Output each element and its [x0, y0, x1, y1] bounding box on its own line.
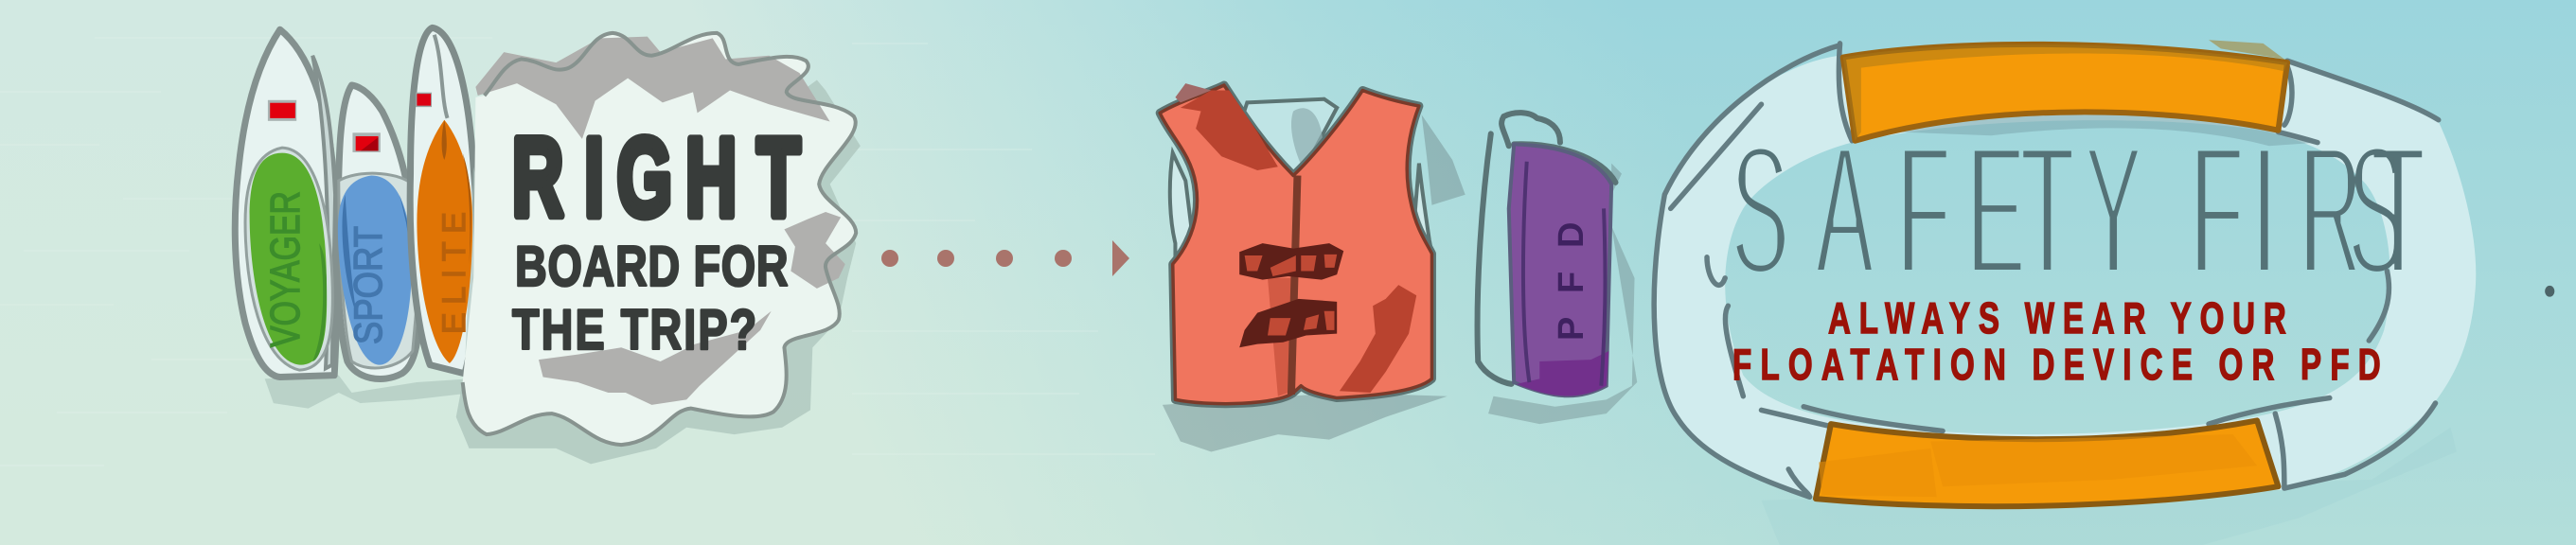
text: Voyager board label: VOYAGER	[262, 191, 309, 347]
pack darker base	[1517, 351, 1608, 396]
pack outline and handle	[1478, 113, 1615, 384]
board shadows	[265, 376, 473, 409]
top band dark edge	[1843, 40, 2287, 141]
vest outer outline	[1160, 85, 1431, 404]
blob outline	[463, 33, 856, 445]
buckle straps	[1239, 243, 1343, 347]
text: PFD label: PFD	[1552, 222, 1591, 341]
blob shadow	[456, 79, 861, 464]
icon: PFD pack	[1478, 113, 1637, 424]
pack body	[1509, 144, 1611, 396]
board: Voyager	[235, 29, 337, 378]
board: Elite	[410, 27, 493, 374]
blob fill	[463, 33, 856, 445]
pack shadow	[1488, 164, 1637, 424]
pack seams	[1523, 162, 1606, 386]
vest dark washes	[1181, 90, 1416, 396]
heading: RIGHT: RIGHT	[512, 114, 800, 239]
board: Sport	[337, 85, 419, 379]
panel: paddle boards	[235, 27, 493, 409]
text: floatation device or PFD: FLOATATION DEVICE OR PFD	[1732, 342, 2381, 389]
ring shadow	[1761, 428, 2457, 545]
buckle holes	[1245, 255, 1337, 335]
top orange band	[1843, 44, 2287, 141]
panel: speech blob	[456, 33, 861, 464]
heading: SAFETY FIRST: SAFETY FIRST	[1732, 109, 2425, 313]
grey wash patches	[475, 37, 845, 405]
vest shadow	[1163, 114, 1466, 451]
collar mark	[1175, 83, 1211, 102]
ring outlines	[1654, 44, 2439, 497]
bottom orange band	[1816, 420, 2278, 506]
collar back	[1242, 99, 1337, 175]
text: always wear your: ALWAYS WEAR YOUR	[1828, 295, 2286, 343]
ring inner shadow	[1900, 114, 2318, 146]
centre seam	[1291, 175, 1297, 395]
vest body	[1160, 85, 1431, 404]
dotted arrow	[881, 240, 1129, 276]
heading: BOARD FOR: BOARD FOR	[515, 235, 789, 298]
armhole straps	[1170, 153, 1431, 260]
text: Sport board label: SPORT	[346, 226, 390, 344]
stray speck	[2545, 286, 2554, 297]
bottom band shading	[1819, 434, 2257, 497]
heading: THE TRIP?: THE TRIP?	[512, 298, 756, 361]
text: Elite board label: ELITE	[436, 212, 472, 334]
ring body	[1654, 56, 2476, 497]
icon: life vest	[1160, 83, 1466, 451]
icon: life ring	[1654, 40, 2554, 545]
